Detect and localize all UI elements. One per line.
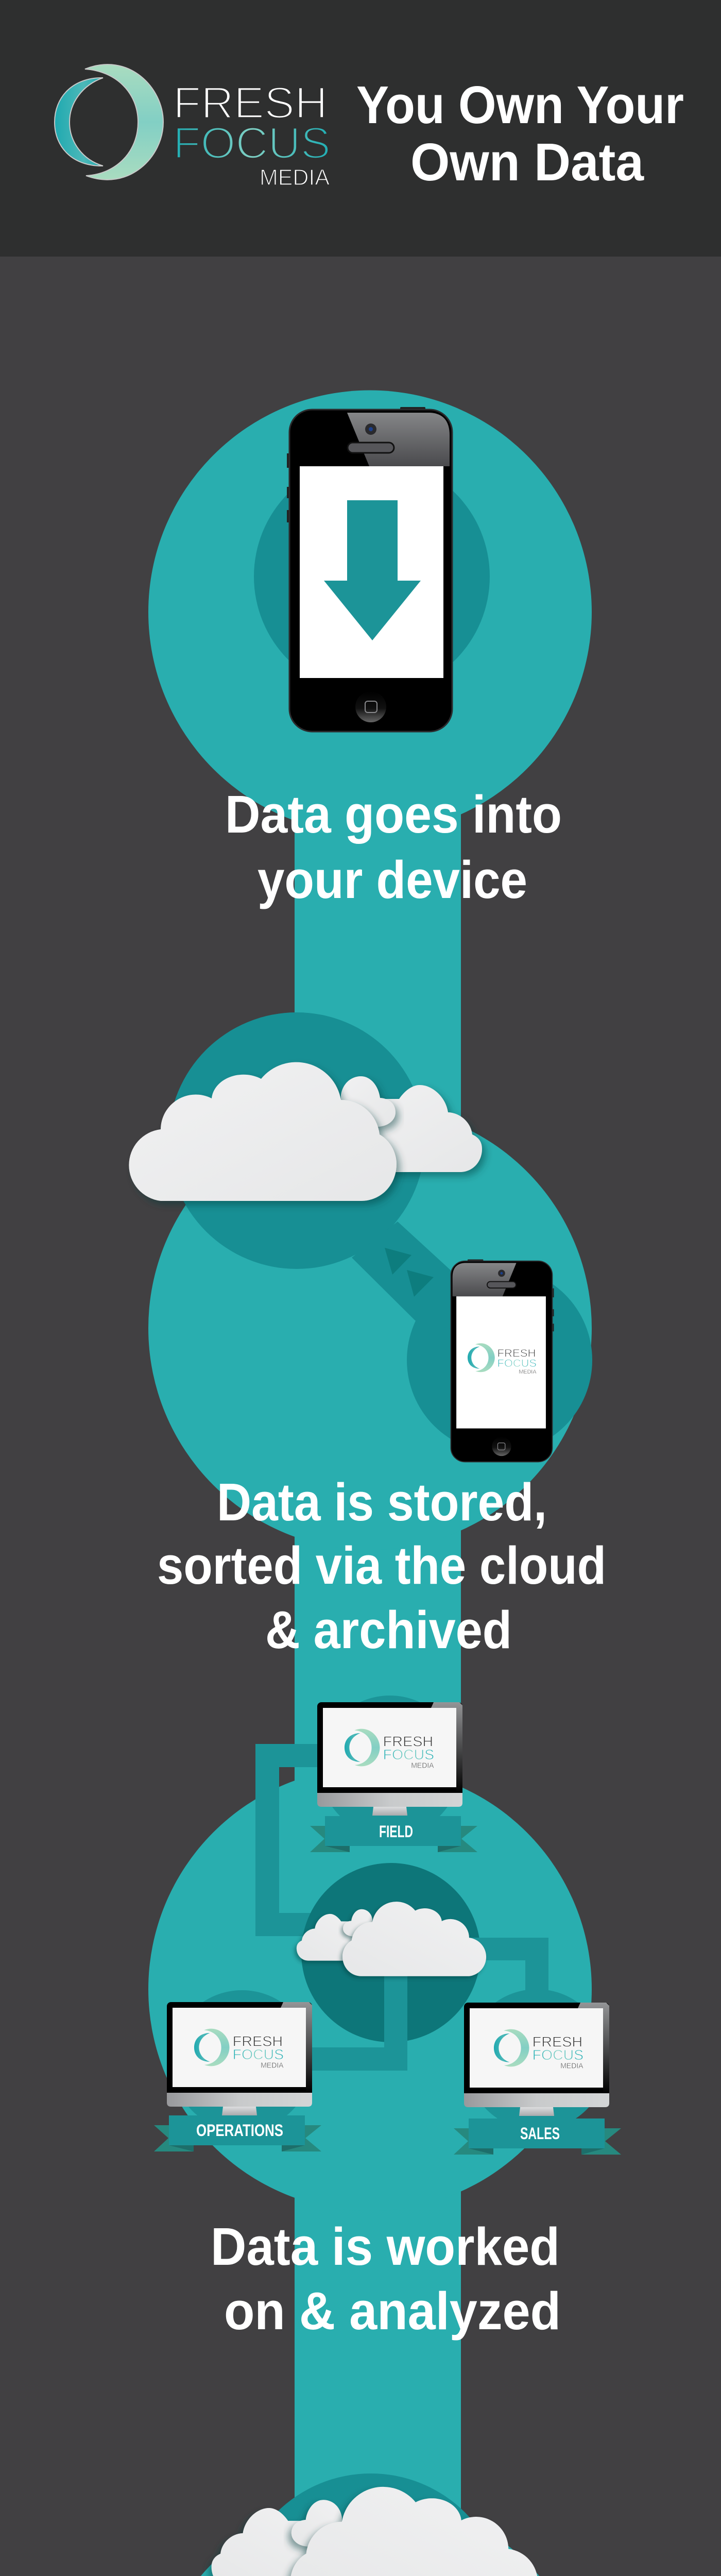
connector lines over centre circle [309,1938,548,2071]
arrow markers [385,1248,434,1297]
device backing circle [407,1267,592,1453]
monitor: field: FRESH [383,1733,433,1749]
logo: Fresh Focus Media [55,64,331,190]
connector lines [255,1744,360,1936]
title: You Own Your [356,75,684,134]
caption [225,785,562,909]
icon: phone with logo: MEDIA [519,1369,537,1375]
ribbon: sales [454,2119,621,2155]
ribbon: operations [154,2115,321,2151]
ribbon: field: FIELD [379,1822,413,1841]
logo: Fresh Focus Media: FOCUS [173,118,331,168]
title [356,75,684,192]
cloud backing circle [237,2473,504,2576]
main circle [148,1107,592,1550]
icon: phone with logo: FOCUS [497,1357,537,1369]
icon: clouds [212,2487,538,2576]
monitor: operations: MEDIA [261,2062,284,2070]
panel: step 1 data goes into device [148,391,592,909]
panel: step 4 data exported [148,2473,592,2576]
caption: Data is worked [211,2217,560,2276]
monitor backing circles [171,1696,607,2131]
monitor: operations [167,2002,312,2115]
main circle [148,391,592,834]
caption [211,2217,561,2341]
ribbon: field [310,1816,477,1852]
title: Own Data [410,132,644,192]
panel: step 2 data stored via the cloud [129,1012,606,1659]
caption: your device [258,850,527,909]
main circle [148,2498,592,2576]
monitor: field [317,1702,462,1816]
icon: clouds [297,1902,486,1976]
monitor: sales [464,2003,609,2116]
monitor: sales: FRESH [533,2033,582,2049]
main circle [148,1767,592,2211]
ribbon: sales: SALES [520,2124,560,2143]
icon: phone with download arrow [287,407,452,732]
header band [0,0,721,257]
centre cloud circle [301,1863,480,2042]
monitor: operations: FRESH [233,2033,283,2049]
ribbon: operations: OPERATIONS [196,2121,283,2140]
caption: on & analyzed [224,2281,561,2341]
monitor: sales: MEDIA [560,2062,583,2071]
caption: sorted via the cloud [157,1536,606,1595]
connecting vertical strip [295,612,461,2576]
icon: clouds [129,1062,482,1201]
logo: Fresh Focus Media: FRESH [173,78,328,128]
cloud backing circle [168,1012,425,1269]
caption: Data goes into [225,785,562,844]
monitor: field: FOCUS [383,1747,434,1762]
monitor: operations: FOCUS [233,2046,284,2062]
panel: step 3 data worked on and analyzed [148,1696,621,2341]
caption: & archived [265,1600,512,1659]
connector band [352,1222,453,1329]
icon: phone with logo [451,1260,554,1462]
caption: Data is stored, [217,1472,547,1532]
monitor: field: MEDIA [411,1762,434,1770]
monitor: sales: FOCUS [533,2047,583,2063]
icon: phone with logo: FRESH [497,1347,536,1359]
logo: Fresh Focus Media: MEDIA [260,165,330,190]
inner circle [254,459,490,694]
caption [157,1472,606,1659]
